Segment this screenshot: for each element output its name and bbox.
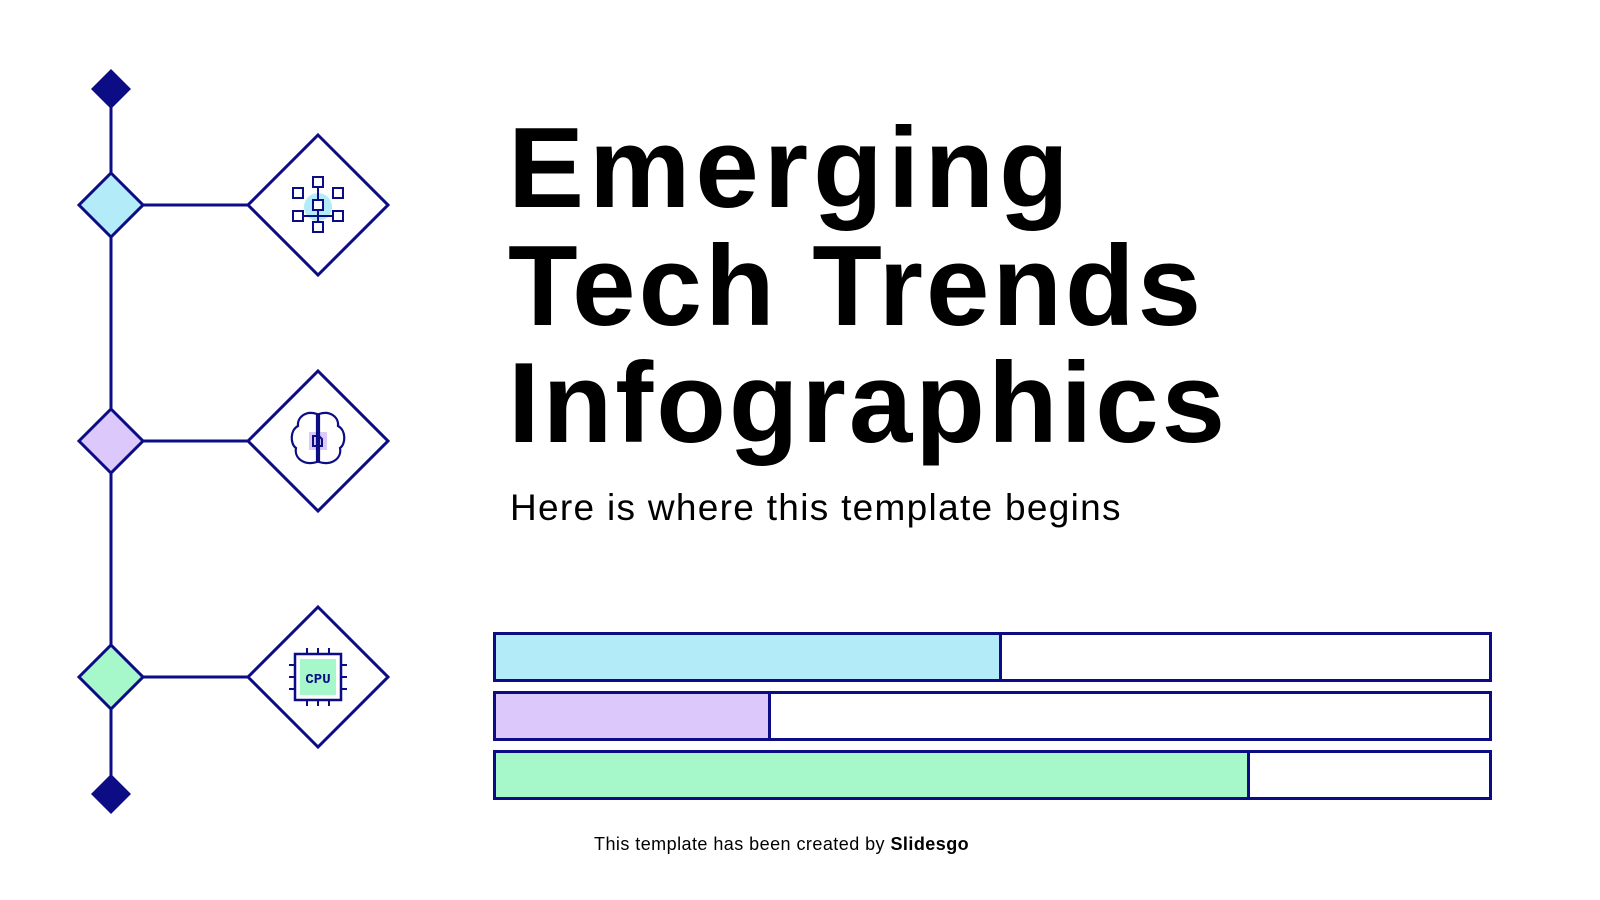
node: lavender bbox=[79, 409, 143, 473]
title bbox=[508, 105, 1228, 467]
timeline graphic bbox=[77, 69, 390, 814]
icon: CPU chip: CPU bbox=[305, 672, 331, 688]
node: mint bbox=[79, 645, 143, 709]
title: Infographics bbox=[508, 340, 1228, 467]
diamond: bottom end bbox=[91, 774, 131, 814]
bar chart bbox=[493, 632, 1492, 800]
footer credit: This template has been created by Slidesgo bbox=[594, 834, 969, 854]
icon: blockchain network bbox=[248, 135, 388, 275]
icon: AI brain bbox=[248, 371, 388, 511]
title: Tech Trends bbox=[508, 223, 1204, 350]
node: cyan bbox=[79, 173, 143, 237]
icon: CPU chip bbox=[248, 607, 388, 747]
diamond: top end bbox=[91, 69, 131, 109]
subtitle: Here is where this template begins bbox=[510, 487, 1122, 528]
title: Emerging bbox=[508, 105, 1074, 232]
